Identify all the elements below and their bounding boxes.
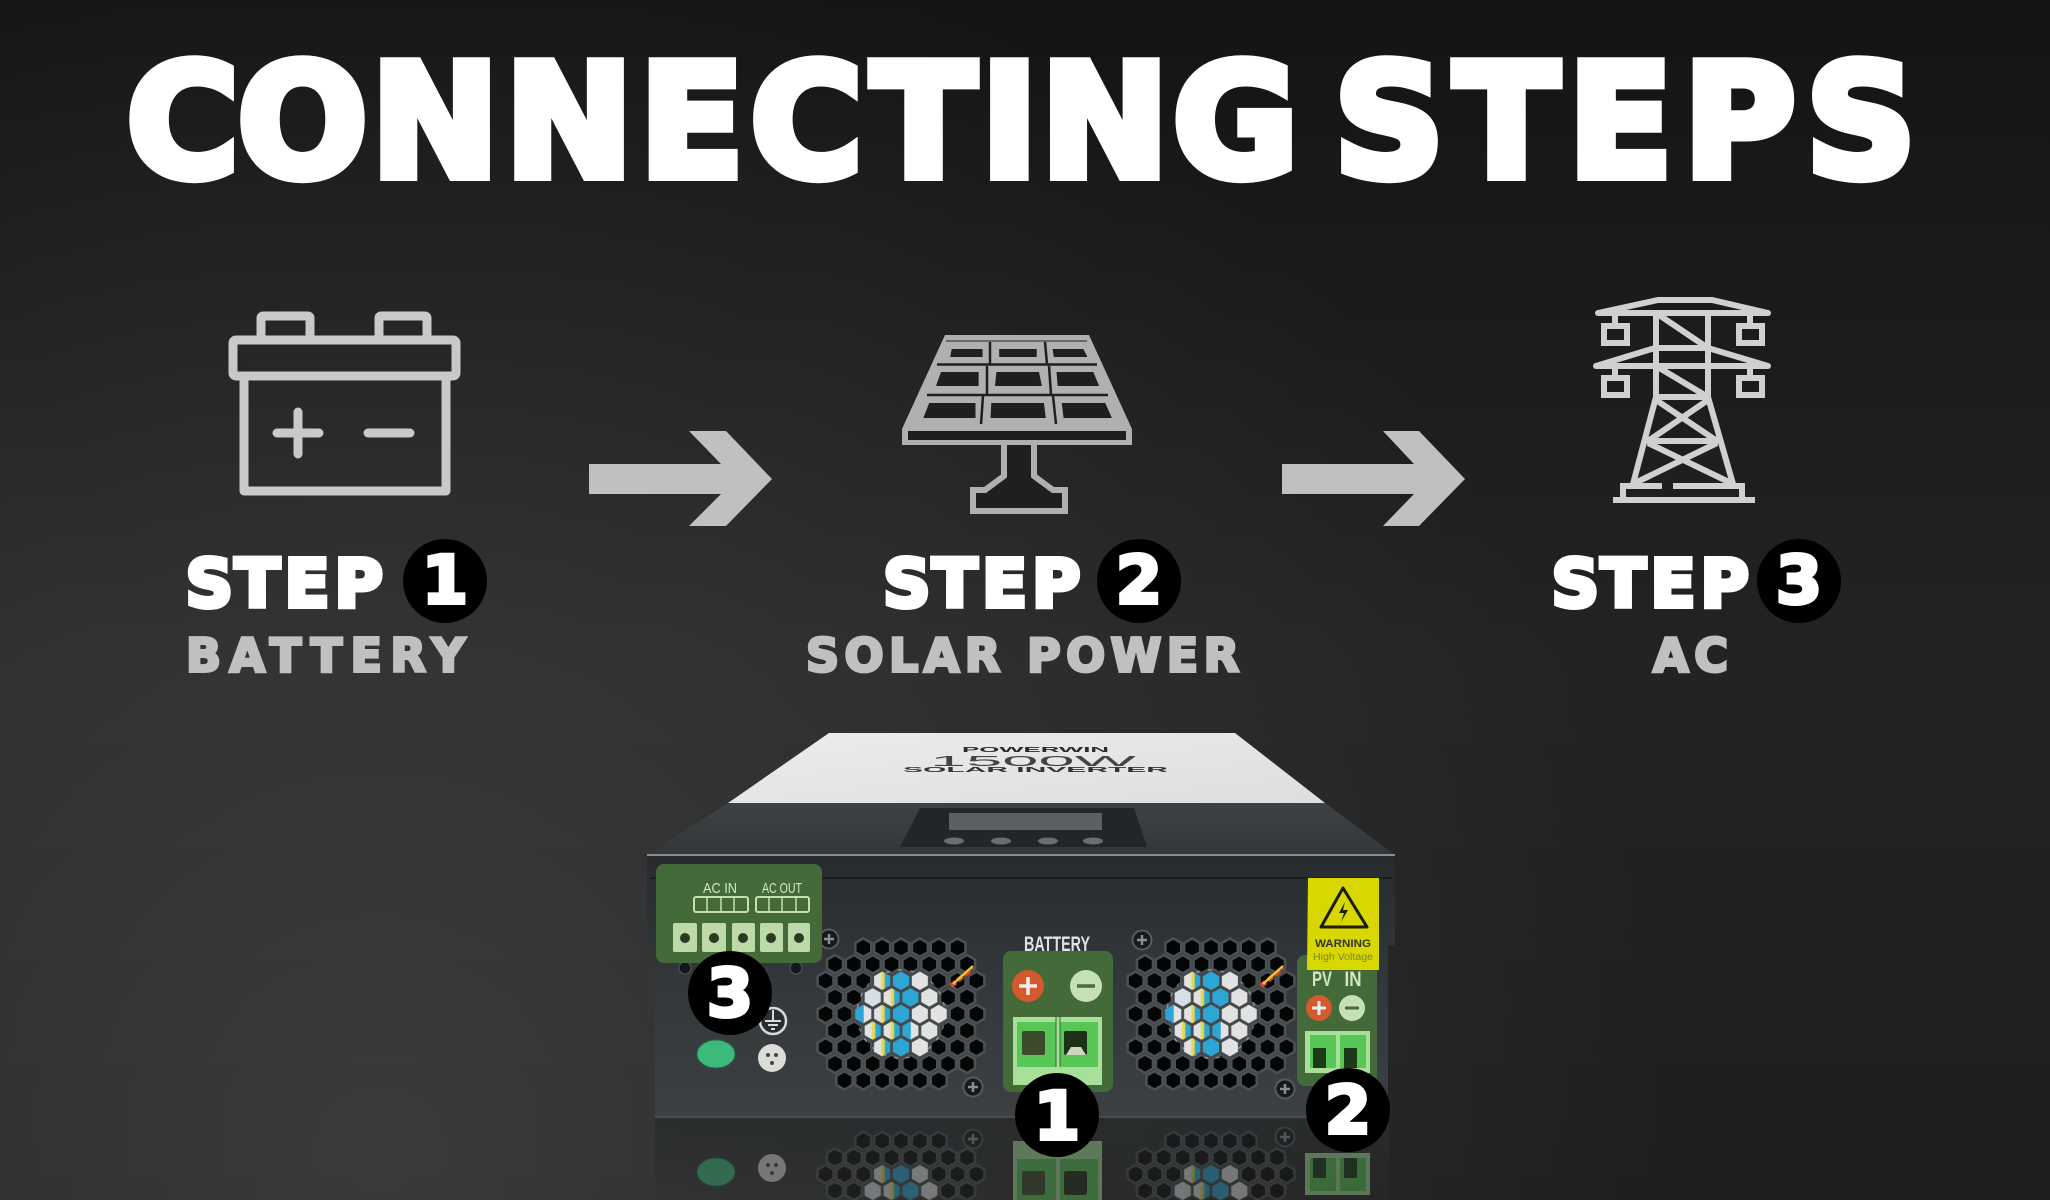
inverter lid bbox=[728, 733, 1325, 803]
callout: number 2 on inverter bbox=[1306, 1068, 1390, 1152]
step 1 heading: STEP bbox=[186, 546, 383, 622]
title: CONNECTING STEPS bbox=[127, 33, 1916, 213]
arrow: battery to solar bbox=[589, 431, 772, 526]
inverter top panel bbox=[647, 803, 1395, 855]
number badge 2: 2 bbox=[1116, 542, 1162, 619]
fan left bbox=[818, 938, 984, 1090]
number badge 1: 1 bbox=[422, 542, 468, 619]
screws bbox=[679, 930, 1294, 1098]
inverter reflection bbox=[655, 1117, 1389, 1200]
AC terminals panel: AC OUT bbox=[762, 880, 802, 897]
warning label bbox=[1307, 878, 1379, 970]
number badge 1 bbox=[403, 539, 487, 623]
arrow: solar to AC bbox=[1282, 431, 1465, 526]
AC terminals panel: AC IN bbox=[703, 880, 737, 897]
callout: number 3 on inverter: 3 bbox=[707, 955, 753, 1032]
number badge 2 bbox=[1097, 539, 1181, 623]
inverter front face bbox=[647, 855, 1395, 1117]
PV terminal panel bbox=[1297, 955, 1377, 1086]
step 3 heading: STEP bbox=[1552, 546, 1749, 622]
inverter bbox=[647, 733, 1395, 1117]
inverter lid: 1500W bbox=[930, 754, 1137, 770]
icon: transmission tower bbox=[1596, 300, 1768, 500]
step 1 heading bbox=[186, 539, 487, 623]
callout: number 1 on inverter bbox=[1015, 1073, 1099, 1157]
icon: solar panel bbox=[902, 335, 1132, 511]
inverter lid: SOLAR INVERTER bbox=[903, 766, 1168, 774]
number badge 3: 3 bbox=[1776, 542, 1822, 619]
battery terminal panel: BATTERY bbox=[1024, 933, 1090, 956]
AC terminals panel bbox=[656, 864, 822, 963]
step 2 heading bbox=[883, 539, 1181, 623]
inverter lid: POWERWIN bbox=[962, 746, 1109, 754]
AC ground and indicator bbox=[697, 1008, 786, 1072]
step 2 heading: STEP bbox=[883, 546, 1080, 622]
warning label: WARNING bbox=[1315, 938, 1371, 950]
step 2 label: SOLAR POWER bbox=[806, 628, 1239, 682]
callout: number 2 on inverter: 2 bbox=[1325, 1072, 1371, 1149]
step 1 label: BATTERY bbox=[186, 628, 466, 682]
warning label: High Voltage bbox=[1313, 952, 1373, 963]
battery terminal panel bbox=[1003, 933, 1113, 1092]
step 3 heading bbox=[1552, 539, 1841, 623]
PV terminal panel: IN bbox=[1344, 968, 1362, 991]
callout: number 1 on inverter: 1 bbox=[1034, 1078, 1080, 1155]
fan right bbox=[1128, 938, 1294, 1090]
step 3 label: AC bbox=[1653, 628, 1728, 682]
control panel bbox=[900, 808, 1147, 847]
number badge 3 bbox=[1757, 539, 1841, 623]
icon: battery bbox=[233, 316, 456, 491]
PV terminal panel: PV bbox=[1312, 968, 1332, 991]
callout: number 3 on inverter bbox=[688, 951, 772, 1035]
